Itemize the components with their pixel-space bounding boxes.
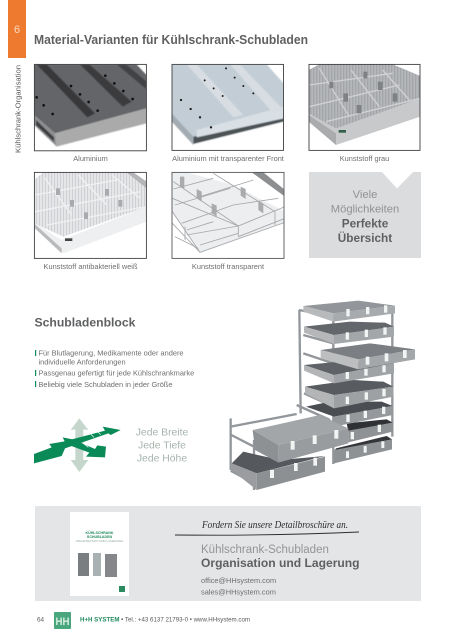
- callout: Viele Möglichkeiten: Übersicht: [338, 231, 392, 245]
- caption: Kunststoff grau: Kunststoff grau: [340, 154, 389, 163]
- side label: Kühlschrank-Organisation: [14, 65, 22, 153]
- drawer 3: [321, 343, 415, 359]
- brochure title: Kühlschrank-Schubladen: [201, 544, 329, 556]
- drawer 5: [305, 380, 393, 395]
- drawer 7: [347, 419, 393, 432]
- photo: aluminium with transparent front: [172, 64, 284, 150]
- photo: white antibacterial drawer: [34, 172, 147, 258]
- brochure cover: SCHUBLADEN: [87, 535, 112, 539]
- dimension text: Jede Tiefe: [138, 440, 186, 452]
- title: Material-Varianten für Kühlschrank-Schubladen: [34, 33, 308, 47]
- contact emails: [201, 576, 276, 596]
- photo: aluminium drawer: [34, 64, 147, 151]
- brochure promo panel: [35, 506, 421, 601]
- drawer 2: [304, 322, 394, 335]
- dimension text: [136, 428, 189, 464]
- dimension text: Jede Breite: [136, 428, 189, 438]
- page number: 64: [37, 616, 45, 624]
- callout: Viele Möglichkeiten: Viele: [353, 189, 377, 201]
- contact emails: sales@HHsystem.com: [201, 588, 276, 596]
- caption: Aluminium mit transparenter Front: Aluminium mit transparenter Front: [172, 154, 284, 163]
- page number tab: 6: [14, 24, 20, 36]
- contact emails: office@HHsystem.com: [201, 576, 276, 585]
- icon: dimension arrows: [34, 418, 121, 472]
- feature list: [35, 348, 194, 389]
- feature list: Für Blutlagerung, Medikamente oder andere: [38, 348, 184, 358]
- dimension text: Jede Höhe: [137, 454, 187, 464]
- drawer 4: [304, 362, 394, 375]
- logo: [54, 612, 71, 629]
- handwritten call to action: Fordern Sie unsere Detailbroschüre an.: [201, 520, 348, 531]
- caption: Kunststoff antibakteriell weiß: Kunststoff antibakteriell weiß: [44, 262, 138, 271]
- feature list: Passgenau gefertigt für jede Kühlschrankmarke: [38, 368, 194, 378]
- brochure cover: [70, 512, 129, 596]
- lower pulled drawer: [232, 452, 325, 473]
- feature list: Beliebig viele Schubladen in jeder Größe: [38, 380, 172, 389]
- logo: HH: [56, 616, 70, 628]
- callout: Viele Möglichkeiten: [309, 172, 421, 258]
- caption: Kunststoff transparent: Kunststoff transparent: [192, 262, 264, 271]
- caption: Aluminium: Aluminium: [73, 154, 108, 163]
- big pulled drawer: [253, 415, 348, 445]
- drawer 1: [303, 301, 395, 313]
- page number tab: [8, 0, 26, 58]
- brochure subtitle: Organisation und Lagerung: [201, 556, 360, 570]
- brochure cover: KÜHLSCHRANK: [86, 530, 114, 535]
- rack frame: [231, 310, 392, 490]
- brochure cover: ORGANISATION UND LAGERUNG: [76, 539, 124, 543]
- photo: grey plastic drawer: [309, 64, 420, 150]
- heading: Schubladenblock: Schubladenblock: [34, 316, 136, 330]
- drawer 6: [306, 402, 393, 417]
- drawer block product image: [231, 301, 415, 490]
- underline stroke: [175, 532, 359, 535]
- drawer 8: [334, 436, 392, 452]
- white labels: [270, 305, 407, 478]
- photo: transparent plastic drawer: [172, 172, 285, 258]
- callout: Viele Möglichkeiten: Perfekte: [342, 216, 389, 230]
- feature list: individuelle Anforderungen: [38, 358, 126, 366]
- footer contact: H+H SYSTEM • Tel.: +43 6137 21793-0 • www.HHsystem.com: [80, 616, 250, 624]
- callout: Viele Möglichkeiten: Möglichkeiten: [331, 204, 399, 216]
